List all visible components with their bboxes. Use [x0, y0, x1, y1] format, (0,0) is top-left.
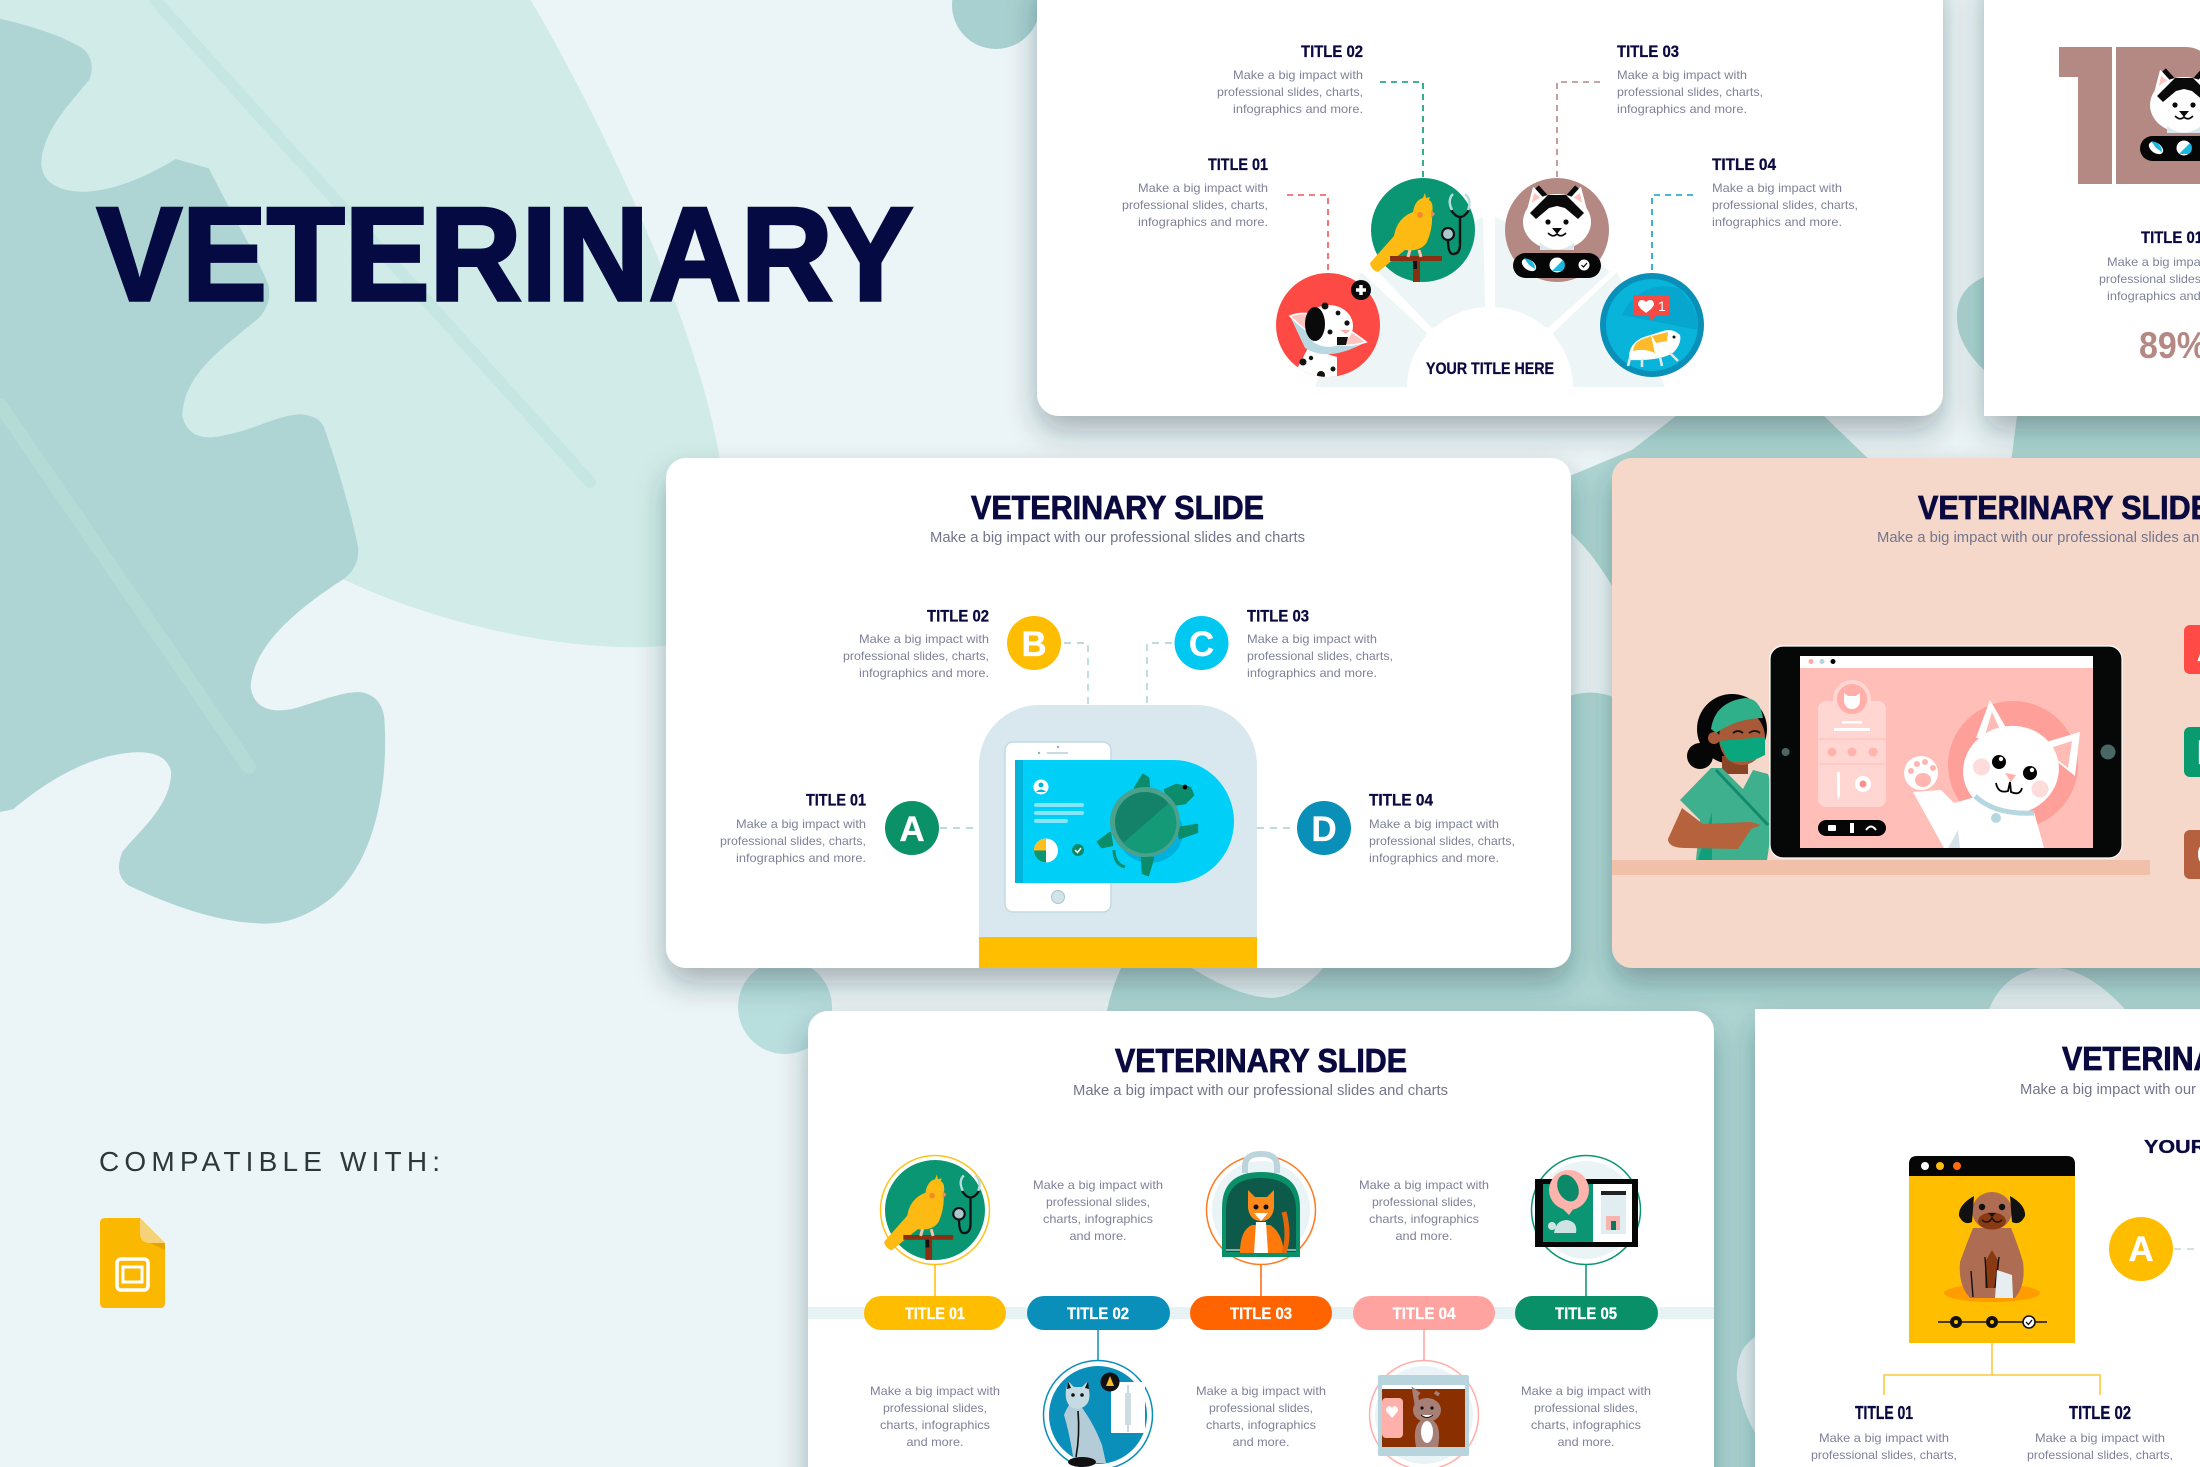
text: column 1: Make a big impact with: [870, 1384, 1000, 1398]
big number: [2059, 47, 2200, 184]
decorative blobs behind slides: [738, 0, 2200, 1467]
cat: [1904, 700, 2080, 848]
badge: C: [2184, 830, 2200, 879]
panel: top radial slide: [1037, 0, 1943, 416]
text: title 02: professional slides, charts,: [843, 649, 989, 663]
badge: A: [2184, 625, 2200, 674]
text: title 03: [1247, 606, 1393, 680]
text: title 04: [1369, 790, 1515, 865]
panel: bottom timeline slide: [808, 1011, 1714, 1467]
text: title 02: infographics and more.: [1233, 102, 1363, 116]
dashed connector: title 01: [1287, 195, 1328, 273]
text: column 4: and more.: [1396, 1229, 1452, 1243]
text: title 02: professional slides, charts,: [1217, 85, 1363, 99]
text: column 3: charts, infographics: [1206, 1418, 1316, 1432]
text: title 01: [1122, 155, 1268, 229]
text: column 1: charts, infographics: [880, 1418, 990, 1432]
icon: husky: [2140, 70, 2200, 161]
text: title 04: infographics and more.: [1369, 851, 1499, 865]
badge: D: [1297, 801, 1351, 855]
text: title 02: Make a big impact with: [859, 632, 989, 646]
text: title 02: TITLE 02: [2069, 1403, 2131, 1423]
icon: hamster circle: 1: [1658, 298, 1666, 314]
text: title 02: [843, 606, 989, 680]
text: title 02: infographics and more.: [859, 666, 989, 680]
text: title 01: professional slides, charts,: [1811, 1448, 1957, 1462]
pill: title 03: [1190, 1296, 1332, 1330]
text: title 04: [1712, 155, 1858, 229]
panel: middle phone slide: [666, 458, 1571, 968]
text: column 2: and more.: [1070, 1229, 1126, 1243]
light leaf: [0, 0, 720, 647]
text: title 03: professional slides, charts,: [1617, 85, 1763, 99]
text: title 02: Make a big impact with: [2035, 1431, 2165, 1445]
text: column 1: and more.: [906, 1435, 964, 1449]
heading: [930, 489, 1305, 546]
badge: D: D: [1311, 810, 1337, 849]
text: column 4: Make a big impact with: [1359, 1178, 1489, 1192]
text: column 3: [1196, 1384, 1326, 1449]
text: title 04: Make a big impact with: [1369, 817, 1499, 831]
pill: title 01: TITLE 01: [905, 1304, 965, 1323]
text: column 4: [1359, 1178, 1489, 1243]
timeline band: [808, 1307, 1714, 1319]
screen interface: [1034, 780, 1084, 862]
text: title 03: Make a big impact with: [1247, 632, 1377, 646]
text: title 01: [720, 790, 866, 865]
text: title 03: TITLE 03: [1247, 606, 1309, 626]
tablet: [1770, 646, 2122, 858]
text: column 5: Make a big impact with: [1521, 1384, 1651, 1398]
badge: A: [2109, 1217, 2173, 1281]
panel: bottom right slide: [1755, 1009, 2200, 1467]
tree connector: [1884, 1343, 2100, 1395]
text: title 02: TITLE 02: [1301, 42, 1363, 61]
text: title 04: TITLE 04: [1369, 790, 1433, 810]
heading: VETERINARY SLIDE: [1115, 1042, 1407, 1079]
icon: turtle: [1098, 775, 1197, 875]
badge: A: [885, 801, 939, 855]
badge: B: B: [1021, 625, 1047, 664]
central title label: YOUR TITLE HERE: [1426, 359, 1554, 378]
panel: pink tablet slide: [1612, 458, 2200, 968]
dashed connector: [2174, 1248, 2200, 1250]
text: title 01: professional slides, charts,: [720, 834, 866, 848]
pill: title 03: TITLE 03: [1230, 1304, 1292, 1323]
text: title 04: professional slides, charts,: [1712, 198, 1858, 212]
pill: title 05: [1515, 1296, 1658, 1330]
connector stems: [935, 1265, 1586, 1362]
heading: VETERINARY SLIDE: [971, 489, 1264, 526]
text: column 1: [870, 1384, 1000, 1449]
dashed connectors: [940, 643, 1296, 828]
radial fan background: [1315, 217, 1665, 387]
icon: parrot circle: [1370, 178, 1475, 282]
text: column 3: professional slides,: [1209, 1401, 1313, 1415]
icon: hamster circle: [1600, 273, 1704, 377]
text: title 02: Make a big impact with: [1233, 68, 1363, 82]
pill: title 05: TITLE 05: [1555, 1304, 1617, 1323]
screen: [1015, 760, 1234, 883]
panel: top right partial slide: [1984, 0, 2200, 416]
heading: [1877, 489, 2200, 546]
compatible with label: COMPATIBLE WITH:: [99, 1146, 440, 1177]
dark leaf: [0, 19, 385, 924]
text: title 03: infographics and more.: [1617, 102, 1747, 116]
text: title 01: infographics and more.: [1138, 215, 1268, 229]
text: title 03: TITLE 03: [1617, 42, 1679, 61]
dog window: [1909, 1156, 2075, 1343]
text: title 03: professional slides, charts,: [1247, 649, 1393, 663]
text: title 01: Make a big impact with: [1819, 1431, 1949, 1445]
pill: title 02: [1027, 1296, 1170, 1330]
badge: C: [1174, 616, 1228, 670]
text: title 02: TITLE 02: [927, 606, 989, 626]
heading: [2020, 1040, 2200, 1098]
badge: B: [1007, 616, 1061, 670]
text: title 01: Make a big impact with: [736, 817, 866, 831]
heading: Make a big impact with our professional slides and charts: [930, 529, 1305, 546]
phone: [1005, 742, 1111, 912]
title: VETERINARY: [97, 181, 913, 329]
text: column 5: and more.: [1558, 1435, 1614, 1449]
text: title 04: infographics and more.: [1712, 215, 1842, 229]
text: title 02: [1217, 42, 1363, 116]
icon: google slides: [100, 1218, 165, 1308]
text: title 01: [2099, 228, 2200, 303]
dashed connector: title 02: [1380, 82, 1423, 177]
icon: tablet ring: [1532, 1156, 1640, 1264]
text: title 01: infographics and more.: [736, 851, 866, 865]
text: column 5: charts, infographics: [1531, 1418, 1641, 1432]
device block: [979, 705, 1257, 968]
nurse: [1668, 694, 1776, 860]
text: title 03: infographics and more.: [1247, 666, 1377, 680]
text: column 2: charts, infographics: [1043, 1212, 1153, 1226]
icon: cat ring: [1044, 1360, 1152, 1467]
text: title 03: Make a big impact with: [1617, 68, 1747, 82]
text: column 2: Make a big impact with: [1033, 1178, 1163, 1192]
text: column 2: professional slides,: [1046, 1195, 1150, 1209]
text: title 04: TITLE 04: [1712, 155, 1776, 174]
pill: title 02: TITLE 02: [1067, 1304, 1129, 1323]
text: title 01: Make a big impact with: [1138, 181, 1268, 195]
icon: dalmatian circle: [1276, 273, 1380, 379]
text: title 01: TITLE 01: [806, 790, 866, 810]
text: column 3: Make a big impact with: [1196, 1384, 1326, 1398]
text: column 2: [1033, 1178, 1163, 1243]
icon: husky circle: [1505, 178, 1609, 282]
heading: [1073, 1042, 1448, 1099]
text: title 02: [2027, 1403, 2173, 1462]
text: column 3: and more.: [1232, 1435, 1290, 1449]
text: column 5: professional slides,: [1534, 1401, 1638, 1415]
text: title 01: TITLE 01: [1208, 155, 1268, 174]
text: title 04: Make a big impact with: [1712, 181, 1842, 195]
app panel: [1818, 680, 1886, 836]
text: column 1: professional slides,: [883, 1401, 987, 1415]
pill: title 04: TITLE 04: [1392, 1304, 1456, 1323]
dashed connector: title 03: [1557, 82, 1600, 177]
text: column 5: [1521, 1384, 1651, 1449]
text: title 01: TITLE 01: [1855, 1403, 1913, 1423]
progress timeline: [1938, 1316, 2047, 1328]
badge: B: [2184, 727, 2200, 777]
icon: rabbit tablet ring: [1370, 1360, 1478, 1467]
badge: C: C: [1189, 625, 1214, 664]
pill: title 01: [864, 1296, 1006, 1330]
ledge: [1612, 860, 2150, 875]
badge: A: A: [2128, 1230, 2154, 1269]
heading: Make a big impact with our professional slides and charts: [1073, 1082, 1448, 1099]
icon: parrot ring: [880, 1156, 990, 1264]
badge: A: A: [899, 810, 925, 849]
dog: [1959, 1192, 2025, 1298]
text: column 4: charts, infographics: [1369, 1212, 1479, 1226]
text: title 01: professional slides, charts,: [1122, 198, 1268, 212]
text: title 04: professional slides, charts,: [1369, 834, 1515, 848]
text: title 01: [1811, 1403, 1957, 1462]
dashed connector: title 04: [1652, 195, 1693, 272]
text: column 4: professional slides,: [1372, 1195, 1476, 1209]
text: title 03: [1617, 42, 1763, 116]
pill: title 04: [1353, 1296, 1495, 1330]
text: title 02: professional slides, charts,: [2027, 1448, 2173, 1462]
icon: cat carrier ring: [1206, 1154, 1316, 1264]
